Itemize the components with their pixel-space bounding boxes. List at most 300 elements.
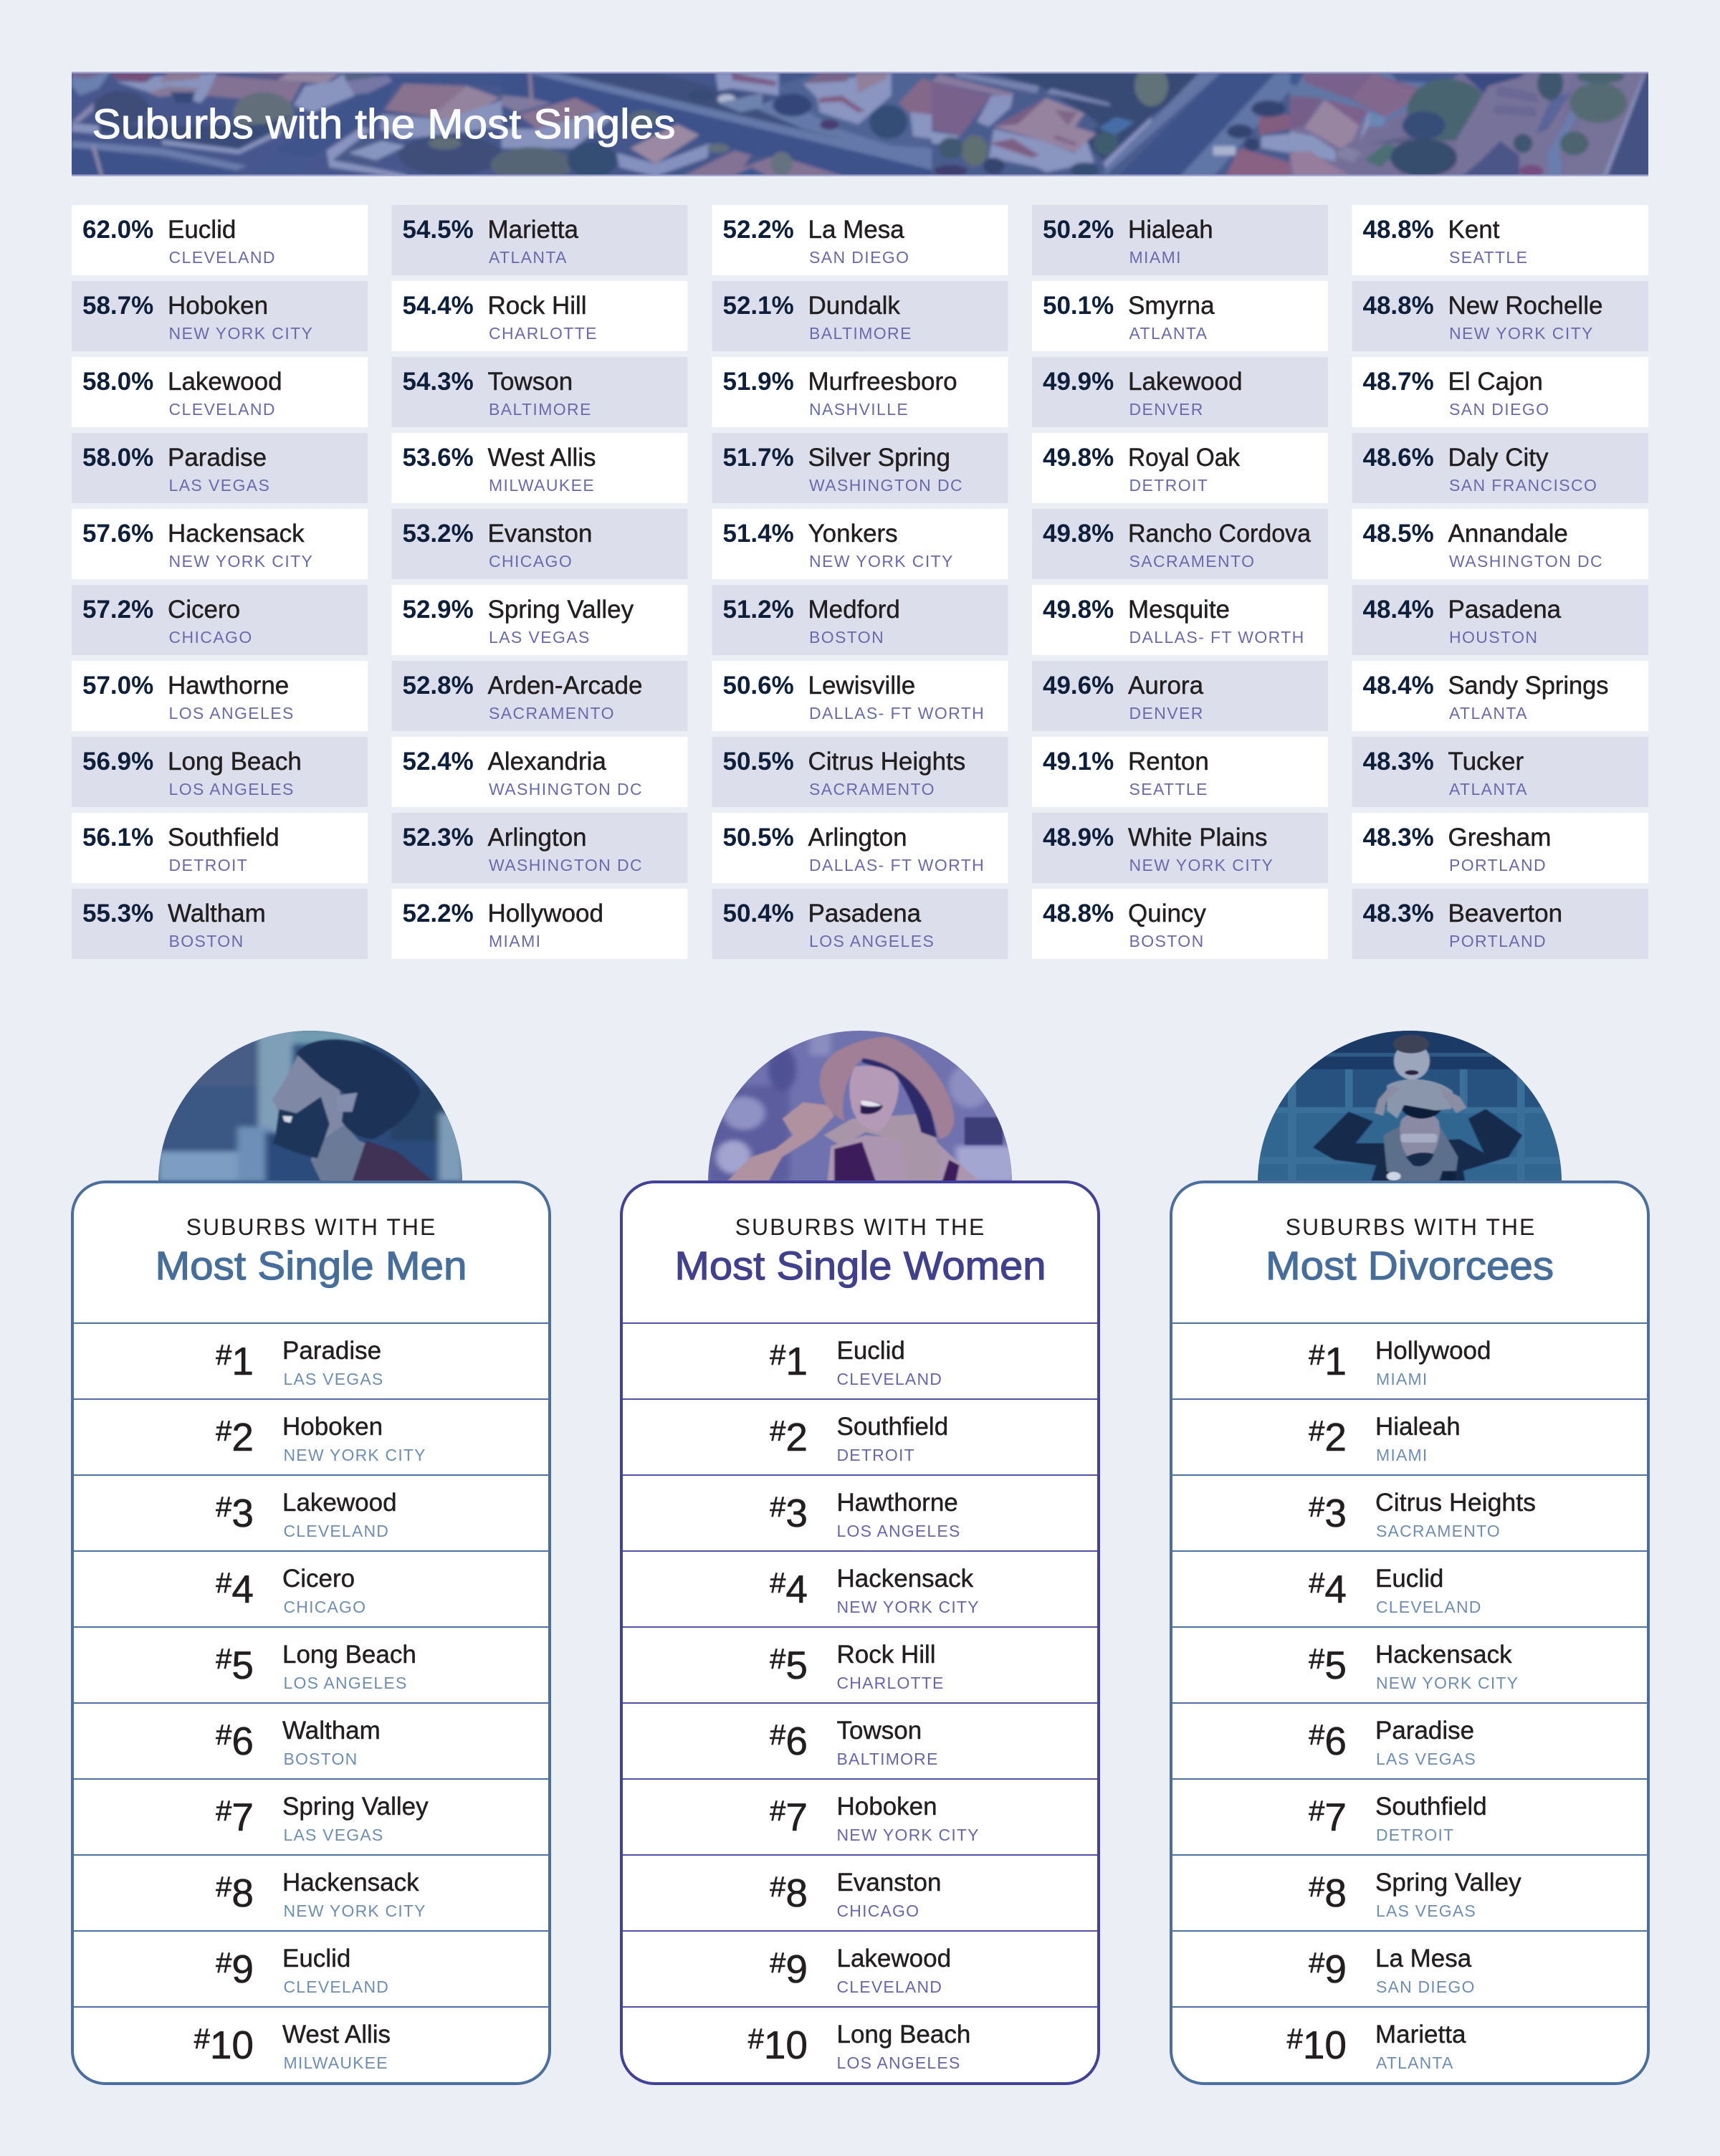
row: Gresham: Gresham xyxy=(1448,824,1551,852)
row: Hialeah: 50.2% xyxy=(1043,216,1114,244)
rank 2 Southfield: # xyxy=(770,1416,786,1447)
row: Mesquite: 49.8% xyxy=(1043,596,1114,624)
row: Evanston: 53.2% xyxy=(403,520,474,548)
row: Silver Spring: Silver Spring xyxy=(808,444,950,472)
row: Spring Valley xyxy=(391,585,688,655)
row: Hackensack: NEW YORK CITY xyxy=(169,552,313,571)
rank 9 La Mesa: 9 xyxy=(1324,1947,1347,1991)
row: El Cajon: 48.7% xyxy=(1363,368,1434,396)
rank 9 La Mesa: # xyxy=(1309,1947,1325,1979)
rank 8 Hackensack: Hackensack xyxy=(282,1869,419,1897)
row: Hawthorne: LOS ANGELES xyxy=(169,704,295,722)
row: Annandale xyxy=(1352,509,1648,579)
row: Hawthorne: Hawthorne xyxy=(168,672,289,700)
rank 3 Citrus Heights: 3 xyxy=(1324,1491,1347,1535)
row: La Mesa: La Mesa xyxy=(808,216,904,244)
rank 1 Euclid xyxy=(623,1322,1097,1388)
heading: most divorcees: Most Divorcees xyxy=(1266,1243,1554,1288)
row: Beaverton: 48.3% xyxy=(1363,900,1434,927)
rank 3 Hawthorne: LOS ANGELES xyxy=(837,1522,960,1540)
heading: suburbs with the: SUBURBS WITH THE xyxy=(735,1214,985,1240)
row: Arden-Arcade: SACRAMENTO xyxy=(489,704,615,722)
row: Arden-Arcade: 52.8% xyxy=(403,672,474,700)
rank 2 Hialeah xyxy=(1172,1398,1647,1464)
rank 2 Hoboken: Hoboken xyxy=(282,1413,383,1441)
rank 7 Hoboken: 7 xyxy=(785,1795,808,1839)
row: Medford: 51.2% xyxy=(722,596,794,624)
row: Annandale: WASHINGTON DC xyxy=(1449,552,1603,571)
row: Royal Oak: DETROIT xyxy=(1129,476,1208,495)
row: Lakewood: 49.9% xyxy=(1043,368,1114,396)
rank 6 Waltham: # xyxy=(216,1719,232,1751)
rank 5 Rock Hill: 5 xyxy=(785,1643,808,1687)
rank 9 La Mesa xyxy=(1172,1930,1647,1996)
row: Hollywood: 52.2% xyxy=(403,900,474,927)
row: Kent: Kent xyxy=(1448,216,1500,244)
row: Hoboken: 58.7% xyxy=(82,292,153,320)
row: Lakewood: CLEVELAND xyxy=(169,400,276,419)
row: Towson xyxy=(391,357,688,427)
row: Pasadena: Pasadena xyxy=(1448,596,1562,624)
heading: suburbs with the: SUBURBS WITH THE xyxy=(1286,1214,1536,1240)
rank 2 Hoboken xyxy=(74,1398,548,1464)
rank 10 Marietta: Marietta xyxy=(1375,2021,1466,2048)
row: Mesquite xyxy=(1032,585,1328,655)
rank 10 Marietta: 10 xyxy=(1303,2023,1347,2067)
rank 7 Hoboken: NEW YORK CITY xyxy=(837,1826,980,1844)
rank 1 Paradise: Paradise xyxy=(282,1337,381,1365)
rank 10 West Allis: 10 xyxy=(210,2023,254,2067)
rank 3 Lakewood xyxy=(74,1474,548,1540)
row: Long Beach xyxy=(72,737,368,807)
row: Cicero: 57.2% xyxy=(82,596,153,624)
rank 6 Paradise: LAS VEGAS xyxy=(1376,1750,1476,1768)
rank 4 Euclid: Euclid xyxy=(1375,1565,1443,1593)
rank 2 Hialeah: 2 xyxy=(1324,1415,1347,1459)
row: Hawthorne xyxy=(72,661,368,731)
rank 6 Towson: BALTIMORE xyxy=(837,1750,939,1768)
row: Yonkers: Yonkers xyxy=(808,520,898,548)
row: Royal Oak: 49.8% xyxy=(1043,444,1114,472)
row: Towson: Towson xyxy=(487,368,573,396)
row: Lewisville xyxy=(712,661,1008,731)
rank 4 Euclid: # xyxy=(1309,1568,1325,1599)
row: Daly City: 48.6% xyxy=(1363,444,1434,472)
row: Murfreesboro xyxy=(712,357,1008,427)
row: Citrus Heights: Citrus Heights xyxy=(808,748,965,776)
banner: aerial suburb photo with title xyxy=(72,72,1648,176)
row: Gresham xyxy=(1352,813,1648,883)
rank 1 Euclid: CLEVELAND xyxy=(837,1370,942,1388)
rank 8 Evanston xyxy=(623,1854,1097,1920)
rank 6 Towson: 6 xyxy=(785,1719,808,1763)
rank 2 Hialeah: # xyxy=(1309,1416,1325,1447)
row: Cicero xyxy=(72,585,368,655)
rank 1 Paradise: 1 xyxy=(231,1339,254,1383)
row: Medford: BOSTON xyxy=(809,628,884,647)
row: Long Beach: 56.9% xyxy=(82,748,153,776)
rank 10 West Allis: # xyxy=(194,2023,211,2055)
row: Spring Valley: 52.9% xyxy=(403,596,474,624)
row: Murfreesboro: 51.9% xyxy=(722,368,794,396)
rank 7 Southfield xyxy=(1172,1778,1647,1844)
rank 8 Evanston: 8 xyxy=(785,1871,808,1915)
row: Yonkers: 51.4% xyxy=(722,520,794,548)
row: Marietta xyxy=(391,205,688,275)
rank 8 Evanston: # xyxy=(770,1871,786,1903)
row: Rancho Cordova xyxy=(1032,509,1328,579)
panel: most divorcees xyxy=(1171,1182,1648,2084)
row: Smyrna: Smyrna xyxy=(1128,292,1215,320)
rank 1 Euclid: 1 xyxy=(785,1339,808,1383)
row: Hialeah: Hialeah xyxy=(1128,216,1213,244)
rank 6 Towson xyxy=(623,1702,1097,1768)
row: Dundalk: Dundalk xyxy=(808,292,900,320)
row: Hackensack: Hackensack xyxy=(168,520,305,548)
rank 3 Lakewood: 3 xyxy=(231,1491,254,1535)
row: La Mesa: SAN DIEGO xyxy=(809,248,909,267)
rank 10 Marietta xyxy=(1172,2006,1647,2072)
row: Spring Valley: LAS VEGAS xyxy=(489,628,591,647)
rank 7 Southfield: # xyxy=(1309,1795,1325,1827)
rank 2 Hoboken: 2 xyxy=(231,1415,254,1459)
rank 7 Spring Valley: LAS VEGAS xyxy=(284,1826,383,1844)
row: Euclid: 62.0% xyxy=(82,216,153,244)
rank 8 Evanston: CHICAGO xyxy=(837,1902,919,1920)
row: Pasadena xyxy=(1352,585,1648,655)
rank 2 Southfield xyxy=(623,1398,1097,1464)
row: Pasadena: 48.4% xyxy=(1363,596,1434,624)
rank 9 Lakewood: Lakewood xyxy=(837,1945,951,1973)
rank 5 Long Beach: LOS ANGELES xyxy=(284,1674,407,1692)
panel frame xyxy=(621,1182,1099,2084)
row: Long Beach: LOS ANGELES xyxy=(169,780,295,798)
row: Smyrna: ATLANTA xyxy=(1129,324,1208,343)
row: Beaverton xyxy=(1352,889,1648,959)
rank 6 Paradise: # xyxy=(1309,1719,1325,1751)
row: West Allis: West Allis xyxy=(487,444,596,472)
rank 7 Spring Valley: 7 xyxy=(231,1795,254,1839)
photo: laughing woman in a straw hat xyxy=(708,1031,1012,1180)
rank 5 Hackensack xyxy=(1172,1626,1647,1692)
row: Annandale: Annandale xyxy=(1448,520,1568,548)
row: Pasadena xyxy=(712,889,1008,959)
row: Rock Hill: CHARLOTTE xyxy=(489,324,598,343)
row: Paradise: Paradise xyxy=(168,444,267,472)
panel: most single women xyxy=(621,1182,1099,2084)
rank 8 Spring Valley: 8 xyxy=(1324,1871,1347,1915)
rank 2 Hoboken: # xyxy=(216,1416,232,1447)
row: Hoboken: Hoboken xyxy=(168,292,268,320)
row: Evanston xyxy=(391,509,688,579)
row: Renton: SEATTLE xyxy=(1129,780,1208,798)
rank 3 Lakewood: Lakewood xyxy=(282,1489,397,1517)
row: West Allis: MILWAUKEE xyxy=(489,476,595,495)
row: Sandy Springs xyxy=(1352,661,1648,731)
rank 1 Paradise: LAS VEGAS xyxy=(284,1370,383,1388)
rank 9 Lakewood: # xyxy=(770,1947,786,1979)
row: Pasadena: HOUSTON xyxy=(1449,628,1538,647)
rank 7 Southfield: 7 xyxy=(1324,1795,1347,1839)
row: New Rochelle: 48.8% xyxy=(1363,292,1434,320)
row: Sandy Springs: 48.4% xyxy=(1363,672,1434,700)
row: Tucker: 48.3% xyxy=(1363,748,1434,776)
row: Evanston: Evanston xyxy=(487,520,592,548)
rank 6 Towson: # xyxy=(770,1719,786,1751)
row: Waltham: Waltham xyxy=(168,900,266,927)
row: Lakewood xyxy=(1032,357,1328,427)
row: Rock Hill xyxy=(391,281,688,351)
row: Tucker: ATLANTA xyxy=(1449,780,1528,798)
rank 7 Southfield: DETROIT xyxy=(1376,1826,1454,1844)
row: Dundalk: BALTIMORE xyxy=(809,324,912,343)
rank 6 Paradise: 6 xyxy=(1324,1719,1347,1763)
rank 4 Euclid: CLEVELAND xyxy=(1376,1598,1482,1616)
row: White Plains: 48.9% xyxy=(1043,824,1114,852)
row: Lewisville: Lewisville xyxy=(808,672,915,700)
row: Daly City xyxy=(1352,433,1648,503)
rank 4 Euclid xyxy=(1172,1550,1647,1616)
rank 9 La Mesa: SAN DIEGO xyxy=(1376,1978,1476,1996)
row: Waltham: BOSTON xyxy=(169,932,244,950)
row: Lakewood: Lakewood xyxy=(1128,368,1243,396)
row: Arden-Arcade: Arden-Arcade xyxy=(487,672,642,700)
rank 9 La Mesa: La Mesa xyxy=(1375,1945,1472,1973)
row: Murfreesboro: NASHVILLE xyxy=(809,400,909,419)
row: Marietta: Marietta xyxy=(487,216,578,244)
title: Suburbs with the Most Singles xyxy=(92,101,675,148)
row: Marietta: ATLANTA xyxy=(489,248,568,267)
photo: smiling man with beard xyxy=(158,1031,462,1180)
row: Dundalk: 52.1% xyxy=(722,292,794,320)
rank 1 Hollywood: MIAMI xyxy=(1376,1370,1428,1388)
row: Silver Spring xyxy=(712,433,1008,503)
rank 2 Hialeah: Hialeah xyxy=(1375,1413,1461,1441)
row: Evanston: CHICAGO xyxy=(489,552,573,571)
row: Hackensack xyxy=(72,509,368,579)
row: Renton xyxy=(1032,737,1328,807)
row: West Allis xyxy=(391,433,688,503)
rank 3 Lakewood: CLEVELAND xyxy=(284,1522,389,1540)
rank 8 Evanston: Evanston xyxy=(837,1869,941,1897)
row: Kent: SEATTLE xyxy=(1449,248,1528,267)
row: Royal Oak xyxy=(1032,433,1328,503)
rank 5 Hackensack: Hackensack xyxy=(1375,1641,1512,1669)
row: Paradise xyxy=(72,433,368,503)
row: Rancho Cordova: SACRAMENTO xyxy=(1129,552,1255,571)
row: Kent: 48.8% xyxy=(1363,216,1434,244)
rank 4 Hackensack: Hackensack xyxy=(837,1565,974,1593)
row: Pasadena: LOS ANGELES xyxy=(809,932,935,950)
row: White Plains: NEW YORK CITY xyxy=(1129,856,1274,874)
rank 9 Lakewood xyxy=(623,1930,1097,1996)
rank 1 Euclid: # xyxy=(770,1340,786,1371)
rank 2 Southfield: DETROIT xyxy=(837,1446,915,1464)
row: Renton: 49.1% xyxy=(1043,748,1114,776)
table column 5 xyxy=(1352,205,1648,959)
row: Hoboken: NEW YORK CITY xyxy=(169,324,313,343)
rank 9 Euclid: # xyxy=(216,1947,232,1979)
row: Pasadena: 50.4% xyxy=(722,900,794,927)
rank 4 Hackensack xyxy=(623,1550,1097,1616)
row: Lewisville: DALLAS- FT WORTH xyxy=(809,704,985,722)
rank 5 Rock Hill: # xyxy=(770,1644,786,1675)
rank 9 Euclid: Euclid xyxy=(282,1945,350,1973)
row: Lakewood: Lakewood xyxy=(168,368,282,396)
row: Medford: Medford xyxy=(808,596,900,624)
row: Hoboken xyxy=(72,281,368,351)
row: Royal Oak: Royal Oak xyxy=(1128,444,1240,472)
row: Quincy: 48.8% xyxy=(1043,900,1114,927)
row: White Plains: White Plains xyxy=(1128,824,1268,852)
row: Alexandria xyxy=(391,737,688,807)
rank 9 Lakewood: 9 xyxy=(785,1947,808,1991)
heading: suburbs with the: SUBURBS WITH THE xyxy=(186,1214,436,1240)
rank 4 Cicero: CHICAGO xyxy=(284,1598,366,1616)
rank 10 Marietta: # xyxy=(1287,2023,1304,2055)
row: Alexandria: 52.4% xyxy=(403,748,474,776)
rank 10 Long Beach: 10 xyxy=(764,2023,808,2067)
row: Mesquite: Mesquite xyxy=(1128,596,1230,624)
rank 10 West Allis: West Allis xyxy=(282,2021,391,2048)
rank 6 Waltham: Waltham xyxy=(282,1717,381,1745)
row: Arlington: DALLAS- FT WORTH xyxy=(809,856,985,874)
rank 7 Spring Valley: Spring Valley xyxy=(282,1793,429,1821)
rank 5 Hackensack: # xyxy=(1309,1644,1325,1675)
table column 4 xyxy=(1032,205,1328,959)
rank 5 Long Beach: # xyxy=(216,1644,232,1675)
row: Quincy: Quincy xyxy=(1128,900,1206,927)
rank 4 Cicero: 4 xyxy=(231,1567,254,1611)
row: Citrus Heights: SACRAMENTO xyxy=(809,780,935,798)
row: Towson: 54.3% xyxy=(403,368,474,396)
row: Gresham: 48.3% xyxy=(1363,824,1434,852)
rank 4 Cicero: # xyxy=(216,1568,232,1599)
rank 3 Citrus Heights xyxy=(1172,1474,1647,1540)
rank 5 Hackensack: 5 xyxy=(1324,1643,1347,1687)
row: Hialeah xyxy=(1032,205,1328,275)
row: Lakewood xyxy=(72,357,368,427)
row: Hackensack: 57.6% xyxy=(82,520,153,548)
rank 6 Towson: Towson xyxy=(837,1717,922,1745)
table column 3 xyxy=(712,205,1008,959)
row: Cicero: Cicero xyxy=(168,596,240,624)
row: Hawthorne: 57.0% xyxy=(82,672,153,700)
row: La Mesa: 52.2% xyxy=(722,216,794,244)
heading: most single women: Most Single Women xyxy=(675,1243,1046,1288)
row: Citrus Heights: 50.5% xyxy=(722,748,794,776)
row: Tucker xyxy=(1352,737,1648,807)
row: Murfreesboro: Murfreesboro xyxy=(808,368,957,396)
rank 2 Southfield: Southfield xyxy=(837,1413,948,1441)
rank 7 Hoboken xyxy=(623,1778,1097,1844)
row: Hollywood: MIAMI xyxy=(489,932,541,950)
rank 1 Hollywood xyxy=(1172,1322,1647,1388)
row: Euclid: CLEVELAND xyxy=(169,248,276,267)
rank 2 Hialeah: MIAMI xyxy=(1376,1446,1428,1464)
rank 4 Euclid: 4 xyxy=(1324,1567,1347,1611)
row: Waltham xyxy=(72,889,368,959)
row: Arlington: 50.5% xyxy=(722,824,794,852)
rank 1 Euclid: Euclid xyxy=(837,1337,905,1365)
rank 8 Hackensack: 8 xyxy=(231,1871,254,1915)
row: Aurora: DENVER xyxy=(1129,704,1204,722)
row: Aurora xyxy=(1032,661,1328,731)
rank 4 Hackensack: NEW YORK CITY xyxy=(837,1598,980,1616)
rank 10 West Allis: MILWAUKEE xyxy=(284,2054,388,2072)
rank 6 Paradise xyxy=(1172,1702,1647,1768)
rank 6 Waltham: BOSTON xyxy=(284,1750,358,1768)
row: Silver Spring: WASHINGTON DC xyxy=(809,476,963,495)
rank 5 Hackensack: NEW YORK CITY xyxy=(1376,1674,1519,1692)
rank 5 Rock Hill xyxy=(623,1626,1097,1692)
row: Marietta: 54.5% xyxy=(403,216,474,244)
rank 7 Spring Valley xyxy=(74,1778,548,1844)
heading: most single men: Most Single Men xyxy=(155,1243,467,1288)
row: Hialeah: MIAMI xyxy=(1129,248,1182,267)
row: Alexandria: WASHINGTON DC xyxy=(489,780,643,798)
rank 8 Hackensack: # xyxy=(216,1871,232,1903)
row: El Cajon xyxy=(1352,357,1648,427)
row: Arden-Arcade xyxy=(391,661,688,731)
rank 8 Spring Valley: LAS VEGAS xyxy=(1376,1902,1476,1920)
row: La Mesa xyxy=(712,205,1008,275)
row: Dundalk xyxy=(712,281,1008,351)
row: Smyrna: 50.1% xyxy=(1043,292,1114,320)
row: West Allis: 53.6% xyxy=(403,444,474,472)
rank 5 Long Beach: 5 xyxy=(231,1643,254,1687)
row: Euclid xyxy=(72,205,368,275)
row: Mesquite: DALLAS- FT WORTH xyxy=(1129,628,1305,647)
row: Gresham: PORTLAND xyxy=(1449,856,1547,874)
rank 1 Paradise: # xyxy=(216,1340,232,1371)
row: Southfield: 56.1% xyxy=(82,824,153,852)
row: Yonkers xyxy=(712,509,1008,579)
rank 3 Hawthorne: # xyxy=(770,1492,786,1523)
rank 9 Euclid xyxy=(74,1930,548,1996)
rank 3 Citrus Heights: SACRAMENTO xyxy=(1376,1522,1501,1540)
rank 7 Hoboken: # xyxy=(770,1795,786,1827)
row: Towson: BALTIMORE xyxy=(489,400,592,419)
rank 5 Rock Hill: CHARLOTTE xyxy=(837,1674,945,1692)
rank 6 Waltham: 6 xyxy=(231,1719,254,1763)
row: Rock Hill: 54.4% xyxy=(403,292,474,320)
row: Rancho Cordova: Rancho Cordova xyxy=(1128,520,1312,548)
row: Aurora: Aurora xyxy=(1128,672,1204,700)
table column 2 xyxy=(391,205,688,959)
row: Lakewood: 58.0% xyxy=(82,368,153,396)
row: Arlington: WASHINGTON DC xyxy=(489,856,643,874)
rank 2 Hoboken: NEW YORK CITY xyxy=(284,1446,426,1464)
photo: father with child on his shoulders xyxy=(1258,1031,1562,1180)
row: Tucker: Tucker xyxy=(1448,748,1524,776)
rank 4 Cicero xyxy=(74,1550,548,1616)
row: Daly City: SAN FRANCISCO xyxy=(1449,476,1597,495)
row: Arlington xyxy=(391,813,688,883)
row: Spring Valley: Spring Valley xyxy=(487,596,634,624)
row: Hollywood: Hollywood xyxy=(487,900,603,927)
rank 1 Hollywood: 1 xyxy=(1324,1339,1347,1383)
row: Sandy Springs: Sandy Springs xyxy=(1448,672,1608,700)
row: Arlington: Arlington xyxy=(487,824,587,852)
rank 7 Hoboken: Hoboken xyxy=(837,1793,937,1821)
rank 5 Rock Hill: Rock Hill xyxy=(837,1641,936,1669)
rank 8 Spring Valley: Spring Valley xyxy=(1375,1869,1521,1897)
panel: most single men xyxy=(72,1182,550,2084)
row: Rancho Cordova: 49.8% xyxy=(1043,520,1114,548)
rank 3 Citrus Heights: Citrus Heights xyxy=(1375,1489,1536,1517)
row: Rock Hill: Rock Hill xyxy=(487,292,587,320)
